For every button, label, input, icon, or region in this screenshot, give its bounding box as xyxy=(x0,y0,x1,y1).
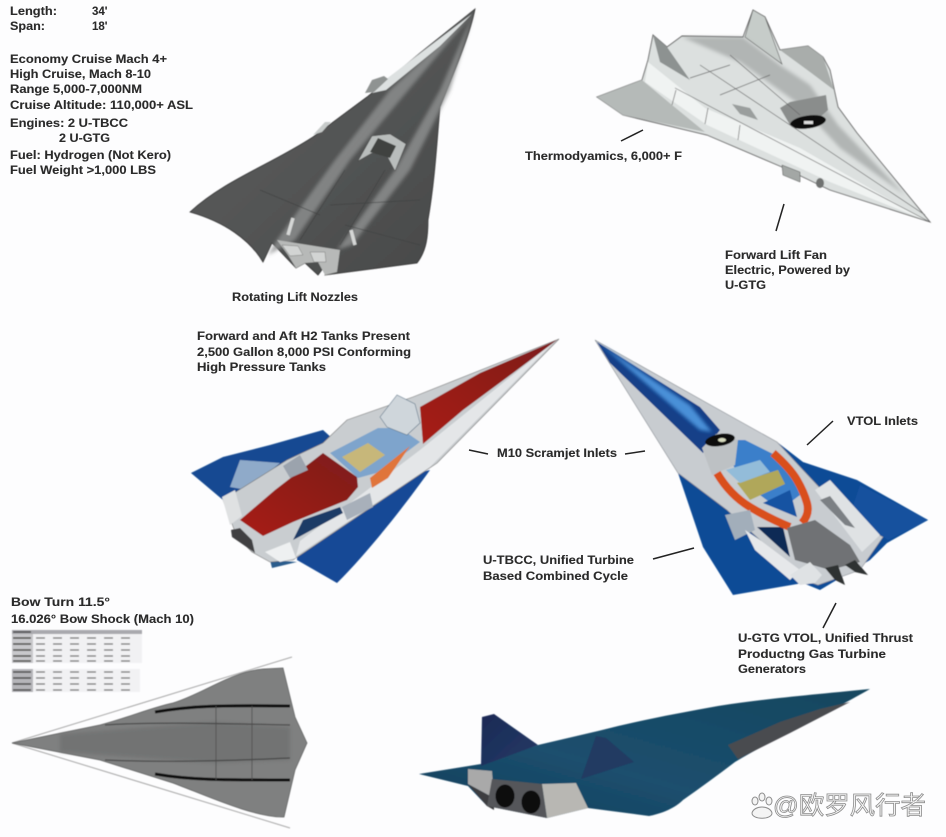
leader: U-TBCC xyxy=(653,548,694,559)
label: VTOL inlets: VTOL Inlets xyxy=(847,416,918,428)
label: U-TBCC xyxy=(483,555,634,583)
avionics bay xyxy=(330,428,420,478)
grey leading-edge patch xyxy=(728,702,850,759)
panel lines xyxy=(260,170,420,245)
engine fairings xyxy=(468,784,494,810)
label: H2 tanks: 2,500 Gallon 8,000 PSI Conforming xyxy=(197,347,411,359)
leader: forward lift fan xyxy=(776,204,784,231)
body highlight bands xyxy=(268,12,474,255)
specifications text block: Fuel: Hydrogen (Not Kero) xyxy=(10,150,171,162)
icon: paw xyxy=(752,793,772,818)
specifications text block: 2 U-GTG xyxy=(59,133,110,145)
clipped top line of specifications xyxy=(12,0,88,2)
specifications text block: High Cruise, Mach 8-10 xyxy=(10,69,151,81)
label: forward lift fan: U-GTG xyxy=(725,280,766,292)
specifications text block: Cruise Altitude: 110,000+ ASL xyxy=(10,100,193,112)
label: forward lift fan: Forward Lift Fan xyxy=(725,250,827,262)
label: H2 tanks xyxy=(197,331,411,374)
label: U-TBCC: Based Combined Cycle xyxy=(483,571,628,583)
specifications text block: Fuel Weight >1,000 LBS xyxy=(10,165,156,177)
label: U-GTG VTOL: Generators xyxy=(738,664,806,676)
second fin xyxy=(581,736,634,779)
aircraft: blue interior cutaway xyxy=(595,340,928,595)
specifications text block: Engines: 2 U-TBCC xyxy=(10,118,128,130)
specifications text block: 18' xyxy=(92,21,108,33)
aircraft: light grey wireframe view xyxy=(597,10,930,222)
white leading-edge strip xyxy=(372,14,472,93)
leader: thermodynamics xyxy=(621,130,643,141)
lift nozzles xyxy=(277,240,340,275)
label: U-TBCC: U-TBCC, Unified Turbine xyxy=(483,555,634,567)
specifications text block: Length: xyxy=(10,6,57,18)
bow shock lines xyxy=(12,657,292,828)
aircraft: red tank cutaway xyxy=(191,339,559,583)
label: M10 scramjet inlets: M10 Scramjet Inlets xyxy=(497,448,617,460)
blue wings xyxy=(191,430,345,500)
leaders: scramjet inlets xyxy=(469,450,645,454)
watermark: @欧罗风行者 xyxy=(773,792,926,820)
fuselage xyxy=(595,340,883,585)
twin nozzles xyxy=(496,784,514,808)
canopy / inlet xyxy=(380,395,420,435)
label: rotating lift nozzles: Rotating Lift Nozzles xyxy=(232,292,358,304)
specifications text block: Economy Cruise Mach 4+ xyxy=(10,54,167,66)
red tanks xyxy=(420,340,557,444)
aircraft: dark teal rear view xyxy=(419,689,870,818)
data table xyxy=(12,630,142,692)
label: U-GTG VTOL xyxy=(738,633,913,676)
leader: U-GTG xyxy=(823,603,836,628)
specifications text block: Span: xyxy=(10,21,45,33)
orange ducts xyxy=(717,473,790,527)
leader: VTOL inlets xyxy=(807,421,833,445)
specifications text block: Range 5,000-7,000NM xyxy=(10,84,142,96)
label: H2 tanks: High Pressure Tanks xyxy=(197,362,326,374)
dark shaded spine xyxy=(682,37,905,195)
aircraft: dark underside view xyxy=(190,9,475,275)
turbine fan xyxy=(702,434,738,475)
bow shock heading: 16.026° Bow Shock (Mach 10) xyxy=(11,614,194,626)
label: thermodynamics: Thermodyamics, 6,000+ F xyxy=(525,151,682,163)
blue interior xyxy=(597,342,720,453)
dark structural bands xyxy=(155,706,290,780)
engines xyxy=(787,520,860,570)
fuselage xyxy=(223,339,559,562)
specifications text block xyxy=(10,6,193,177)
label: U-GTG VTOL: Productng Gas Turbine xyxy=(738,649,886,661)
bow shock heading: Bow Turn 11.5° xyxy=(11,597,110,609)
label: U-GTG VTOL: U-GTG VTOL, Unified Thrust xyxy=(738,633,913,645)
aircraft: grey top planform with bow shock lines xyxy=(12,657,307,828)
engine collars and nozzles xyxy=(342,493,373,520)
label: forward lift fan: Electric, Powered by xyxy=(725,265,851,277)
lift fan doors xyxy=(358,134,406,171)
label: forward lift fan xyxy=(725,250,851,292)
specifications text block: 34' xyxy=(92,6,108,18)
blue wings xyxy=(678,442,928,595)
bow shock heading xyxy=(11,597,194,626)
label: H2 tanks: Forward and Aft H2 Tanks Present xyxy=(197,331,410,343)
fuel bay xyxy=(737,470,785,500)
vertical fin xyxy=(481,714,538,766)
